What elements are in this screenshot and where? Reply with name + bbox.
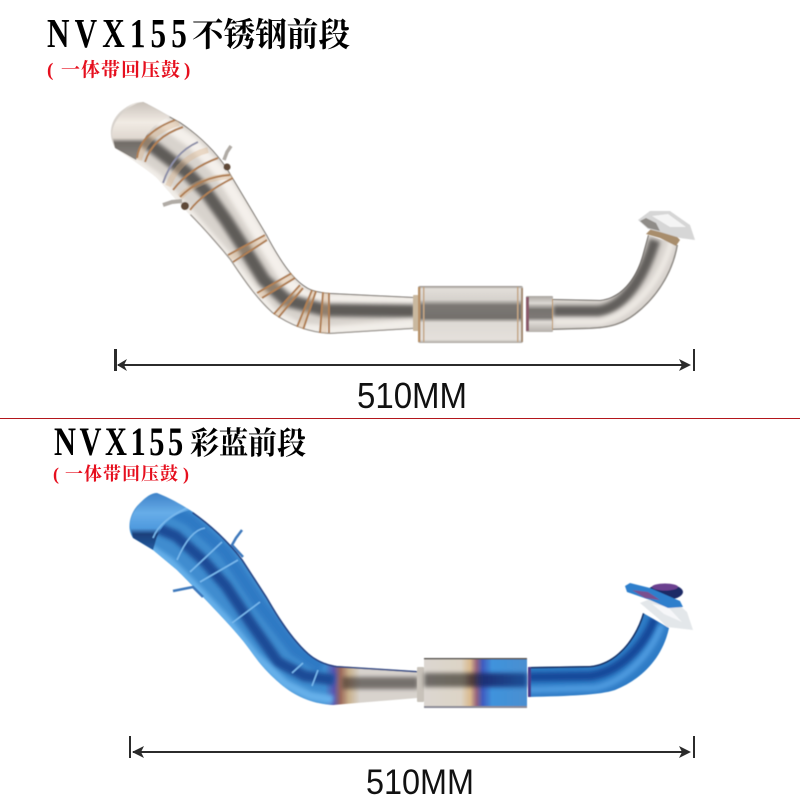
title: blue front section: NVX155 <box>54 419 183 464</box>
blue flange <box>625 583 693 630</box>
mounting tab: upper <box>224 146 231 170</box>
connector sleeve <box>526 296 556 332</box>
muffler <box>418 286 523 343</box>
flange <box>638 211 695 246</box>
blue bend to flange <box>527 612 670 698</box>
title: stainless front section: 不锈钢前段 <box>192 17 350 54</box>
collar <box>417 667 424 702</box>
stainless bend to flange <box>552 234 678 330</box>
title: blue front section: 彩蓝前段 <box>190 426 306 461</box>
stainless exhaust pipe <box>100 90 695 343</box>
blue exhaust pipe <box>120 485 693 710</box>
blue mounting tab: upper <box>232 530 243 557</box>
subtitle: stainless section note: (一体带回压鼓) <box>47 59 190 81</box>
steel mid band on tube <box>342 677 418 689</box>
dimension line <box>114 349 695 371</box>
collar <box>413 295 419 331</box>
mounting tab: lower <box>163 201 189 210</box>
blue mounting tab: lower <box>173 587 203 597</box>
stainless bent inlet pipe <box>110 102 414 335</box>
heat-tinted muffler <box>424 658 527 708</box>
title: stainless front section: NVX155 <box>47 11 187 56</box>
divider line <box>0 418 800 419</box>
title: blue front section <box>54 419 306 464</box>
blue bent inlet pipe <box>120 485 420 710</box>
subtitle: blue section note: (一体带回压鼓) <box>53 464 189 485</box>
dimension line <box>129 736 695 758</box>
dimension: 510MM top <box>114 349 695 416</box>
title: stainless front section <box>47 11 350 56</box>
dimension label: 510MM <box>357 375 467 416</box>
dimension: 510MM bottom <box>129 736 695 800</box>
